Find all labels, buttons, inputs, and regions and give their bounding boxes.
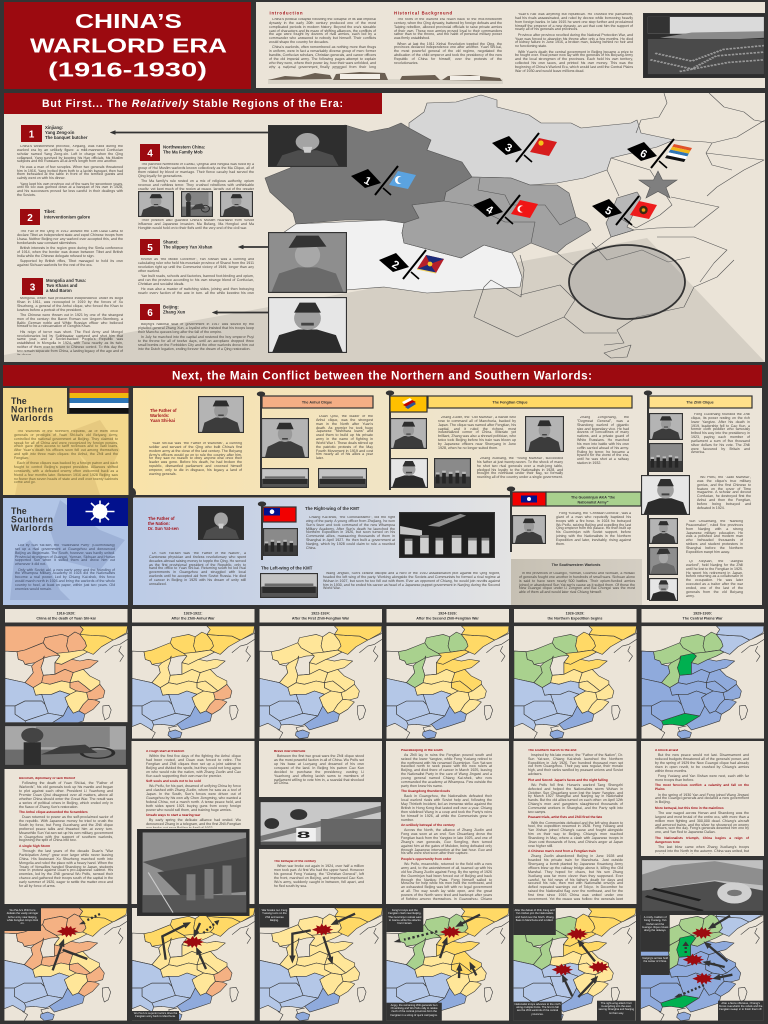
flag: 2 Tibet	[379, 250, 444, 279]
section 2: Tibet: Tibet:	[44, 209, 56, 214]
banner: main conflict heading: Next, the Main Conflict between the Northern and Southern Warlords:	[172, 370, 592, 382]
banner: stable regions heading: But First... The Relatively Stable Regions of the Era:	[42, 98, 343, 110]
text panel: 1926-1929: A Chinese man's nest from a Fengtian train	[528, 849, 596, 853]
text: Xinjiang: Yang kept his own province out of the wars for seventeen years, until he too was gunned down at a banquet of his own in 1928, and his successors proved far less careful in their dealings with the Soviets.	[17, 182, 123, 197]
text panel: 1916-1920: A single Sigh Storm	[19, 844, 50, 848]
photo: Yang Zeng-xin	[268, 125, 347, 167]
text: Xinjiang: He was a man of few scruples. When two generals threatened him in 1916, Yang invited them both to a lavish banquet, then had them beheaded at the table in front of the terrified guests and calmly went on with his dinner.	[17, 165, 123, 180]
text: Sun Yat-sen: Dr. Sun Yat-sen was "the Father of the Nation", a Cantonese physician and tireless revolutionary who spent decades abroad raising money to topple the Qing. He served as the first provisional president of the Republic, only to hand the office to Yuan Shi-kai. Returning south he led rival governments in Guangzhou and struggled with local warlords until he accepted aid from Soviet Russia. He died of cancer in Beijing in 1925 with his dream of unity still unrealized.	[149, 552, 246, 586]
map: First Zhili-Fengtian war	[132, 908, 255, 1021]
photo: Yuan Shi-kai	[198, 396, 244, 433]
text: Wu Peifu: Wu Peifu, the "Jade Marshal", was the clique's true military genius, and the first Chinese to feature on the cover of Time magazine. A scholar and devout Confucian, he destroyed first the Anhui and then the Fengtian, before being betrayed and defeated in 1924.	[697, 476, 751, 510]
map: Central Plains War	[640, 915, 764, 1021]
section: Fengtian Clique	[386, 390, 632, 490]
callout: expedition opening: After the defeat of Zhili, Feng and Yan Xishan join the Nationalists and hand over the North. Zhang flees to Manchuria and is killed.	[515, 909, 554, 922]
section 3: Mongolia and Tuva: 3	[30, 282, 36, 294]
text: historical background, column two: With Yuan's death the central government in Beijing became a prize to be fought over. Real power now lay with the generals of his Beiyang Army and the local strongmen of the provinces. Each held his own territory, collected his own taxes, and printed his own money. This was the beginning of China's Warlord Era, which would last until the Central Plains War of 1930 and would leave millions dead.	[515, 50, 633, 73]
photo: troops by train	[137, 829, 250, 916]
callout: Zhili resurgence: Angry, the remaining Zhili generals Sun Chuanfang and Wu Peifu rally to retake much of the central provinces from the Fengtian in a string of quick campaigns.	[390, 1004, 438, 1017]
text panel: 1929-1930: More betrayal, but this time in the mainlines	[655, 806, 724, 810]
section: KMT wings: The Left-wing of the KMT	[261, 566, 313, 570]
flag: 1 Xinjiang	[351, 166, 416, 195]
timeline column 4	[386, 609, 509, 1021]
arrow: Shanxi portrait	[243, 246, 268, 248]
text: Fengtian general: Zhang Zongchang, the "Dogmeat General", was a Shandong warlord of gigantic size and legendary vice. He had dozens of concubines of many nations, and a private guard of White Russians. He marched his men into battle with his own coffin carried ahead of his army. Ruling by terror, he became a byword for the worst of the era, until he was shot at a railway station in 1932.	[577, 416, 629, 465]
photo: Ma warlord one	[138, 191, 174, 217]
heading: historical background: Historical Background	[394, 10, 452, 16]
photo: Yan Xishan	[268, 232, 347, 293]
header: 1926-1929: the Northern Expedition begins	[548, 616, 602, 620]
callout: First Zhili-Fengtian war	[132, 1011, 179, 1020]
header: 1920-1922: 1920-1922:	[184, 612, 202, 616]
map: 1916-1920	[5, 626, 128, 722]
text panel: 1916-1920: Through the last years of the decade Duan's "War Participation Army" grew ever larger while never leaving China. His lieutenant Xu Shuzheng marched north into Mongolia and ruled the place with a heavy hand. When the Treaty of Versailles handed Shandong to Japan, students rose in protest against Duan's pro-Japanese cabinet. His enemies, led by the Zhili general Wu Peifu, sensed their chance and gathered their troops south of the capital in the early summer of 1920, eager to settle the matter once and for all by force of arms.	[19, 849, 113, 888]
text: Zhang Zuolin: Zhang Zuolin, the "Old Marshal", a bandit who rose to command all of Manchuria, backed by Japan. The clique was named after Fengtian, his capital, and it ruled the richest, most industrialized corner of China. Illiterate yet brilliant, Zhang was also a shrewd politician, who twice took Beijing before his train was blown up by Japanese officers near Shenyang in June 1928, when he no longer suited them.	[438, 416, 516, 450]
callout: Nanjing's defense: Nanjing's armies hold the center of China.	[642, 957, 668, 963]
heading: Southern Warlords: Southern	[11, 514, 53, 524]
section: Guominjun	[507, 486, 641, 554]
text panel: 1926-1929: Inspired by his late mentor, the "Father of the Nation", Dr. Sun Yat-sen, Chiang Kai-shek launched the Northern Expedition in July 1926. Two hundred thousand men set out from Guangzhou. Their pay was regular, their morale high, and their ranks swelled by peasant unions and Soviet advisers.	[528, 753, 623, 776]
flag: 3 Mongolia	[492, 133, 557, 162]
section 3: Mongolia and Tuva: Two Khans and	[46, 283, 78, 288]
photo: Wang Jingwei	[260, 573, 318, 598]
map: Feng Yuxiang's retreat	[386, 908, 509, 1021]
photo: Chiang Kai-shek	[263, 528, 298, 556]
photo: troops on parade	[643, 13, 765, 78]
map: Northern Expedition	[513, 908, 636, 1021]
header: 1924-1926: 1924-1926:	[438, 612, 457, 616]
map: 1926-1929	[514, 626, 636, 739]
photo: Fengtian general	[525, 416, 564, 452]
text: Northern Warlords: Each of these cliques was backed by a foreign patron and each fought to control Beijing's puppet president. Alliances shifted constantly, with a defeated enemy often welcomed back as a friend a few months later. Between 1916 and 1928 Beijing saw no fewer than seven heads of state and well over twenty cabinets come and go.	[14, 461, 118, 484]
section 3: Mongolia and Tuva: Mongolia and Tuva:	[46, 278, 87, 283]
section 1: Xinjiang: Yang Zeng-xin	[45, 130, 75, 135]
heading: Northern Warlords: The	[11, 396, 27, 406]
callout: Feng Yuxiang's retreat	[386, 908, 423, 932]
map: 1922-1924	[260, 626, 382, 739]
section: Yuan Shi-kai: Yuan Shi-kai	[150, 418, 175, 423]
text panel: 1929-1930: Feng Yuxiang and Yan Xishan were next, each with far more troops than before.	[655, 774, 749, 782]
text panel: 1929-1930: But the new peace would not last. Disarmament and reduced budgets threatened all of the generals' power, and by the spring of 1929 the New Guangxi clique had already risen in open revolt, to be crushed by Chiang's armies within three months.	[655, 753, 749, 773]
callout: Zhili-Anhui war	[4, 908, 41, 931]
header: 1926-1929	[514, 609, 636, 622]
panel: Northern Warlords	[3, 388, 129, 495]
section: Southwestern Warlords: The Southwestern Warlords	[552, 563, 600, 567]
callout: expedition eastern thrust: The right-wing attack from Guangdong into the east, seizing Shanghai and Nanjing on their way.	[599, 1002, 634, 1015]
callout: Zhili resurgence	[386, 1003, 442, 1021]
panel: main conflict	[3, 377, 762, 605]
region: Shanxi	[606, 192, 641, 237]
flag: 5 Shanxi	[592, 196, 657, 225]
flag: Blue Sky White Sun	[67, 498, 128, 526]
text: historical background, column two: Province after province revolted during the National Protection War, and Yuan was forced to abandon his throne after only a few months. He died of kidney failure in June 1916, a broken man, leaving behind no heir and no functioning state.	[515, 33, 633, 48]
header: 1929-1930	[642, 609, 764, 622]
text: historical background, column one	[394, 18, 502, 66]
title block: WARLORD ERA	[30, 34, 227, 58]
section 2: Tibet: Interventionism galore	[44, 214, 91, 220]
text: Guominjun: Feng Yuxiang, the "Christian General", was a giant of a man who reputedly baptized his troops with a fire hose. In 1924 he betrayed Wu Peifu, seizing Beijing and expelling the last Qing emperor from the palace. He then built up his Guominjun with Soviet support, before joining with the Nationalists in the Northern Expedition and later, inevitably, rising against them.	[556, 512, 631, 546]
text: Zhili one: Feng Guozhang founded the Zhili clique, its power resting on the rich lower Yangtze. After his death in 1919, leadership fell to Cao Kun, a former cloth peddler who famously bribed his way into the presidency in 1923, paying each member of parliament a sum of five thousand silver dollars for his vote. The Zhili were favoured by Britain and America.	[691, 413, 750, 454]
callout: expedition central thrust: Nationalist troops advance to the north along multiple fronts. The first to fall are the Zhili warlords of the central provinces.	[514, 1003, 560, 1016]
section 1: Xinjiang	[17, 125, 123, 202]
text: Yuan Shi-kai: Yuan Shi-kai was "the Father of Warlords", a cunning soldier and servant of the Qing who built China's first modern army at the close of the last century. The Beiyang Army's officers would go on to rule the country after him, for they saw no reason to obey anyone else once their leader was gone. Before his death, he had broken the republic, dismantled parliament and crowned himself emperor, only to die in disgrace, his legacy a land of warring generals.	[149, 442, 242, 476]
panel: introduction and historical background	[256, 2, 765, 88]
photo: Ma warlord two	[181, 191, 213, 217]
text panel: 1926-1929	[514, 741, 636, 904]
text panel: 1920-1922: Within the first five days of the fighting the Anhui clique had been routed, and Duan was forced to retire. The Fengtian and Zhili cliques then set up a joint cabinet in Beijing and divided the spoils, but they could not long agree on who would rule the nation, with Zhang Zuolin and Cao Kun each supporting their own man for premier.	[146, 754, 241, 778]
flag: 2 Tibet: 2	[390, 259, 401, 272]
section 2: Tibet	[17, 209, 123, 270]
callout: Second Zhili-Fengtian war: War breaks out. Feng Yuxiang turns on the Zhili and seizes Beijing.	[262, 909, 287, 922]
section: Anhui Clique: The Anhui Clique	[302, 400, 332, 404]
header: 1924-1926	[386, 609, 509, 622]
section: Zhili Clique	[641, 390, 752, 601]
text panel: 1926-1929: Plot and Sword: Japan's faces and the night falling	[528, 778, 608, 782]
banner: main conflict heading	[3, 365, 762, 386]
section 5: Shanxi: 5	[147, 243, 153, 254]
photo: Wu Peifu	[641, 475, 690, 515]
photo: Anhui troops	[261, 468, 309, 488]
header: 1920-1922	[132, 609, 254, 622]
timeline column 1	[4, 609, 128, 1021]
section: Yuan Shi-kai: Warlords:	[150, 413, 169, 418]
heading: introduction: Introduction	[270, 10, 303, 16]
section 4: Northwestern China: The Ma Family Mob	[163, 150, 203, 154]
section: Yuan Shi-kai	[149, 396, 244, 482]
heading: Northern Warlords: Warlords	[11, 413, 53, 423]
text: Beijing	[138, 323, 254, 353]
title block: (1916-1930)	[48, 58, 207, 82]
section: Southwestern Warlords	[511, 559, 642, 605]
header: 1929-1930: The Central Plains War	[682, 616, 723, 620]
section 6: Beijing: Beijing:	[163, 304, 179, 310]
flag: Guominjun	[512, 492, 546, 506]
callout: expedition central thrust	[513, 1002, 562, 1021]
text panel: 1926-1929: With the Communists defeated and the left wing drawn to heel, the expedition resumed in 1928. Feng Yuxiang and Yan Xishan joined Chiang's cause and fought alongside him on their way to Beijing. Chiang's men reached Shandong in May, where a clash with Japanese troops in Jinan cost thousands of lives, and China's anger at Japan rose higher still.	[528, 821, 623, 848]
section: Fengtian Clique: The Fengtian Clique	[492, 400, 528, 404]
arrow: Xinjiang portrait	[115, 132, 268, 134]
section 4: Northwestern China: Northwestern China:	[163, 144, 206, 150]
timeline column 6	[641, 609, 764, 1021]
photo: Zhang Xueliang	[390, 458, 428, 488]
header: 1916-1920	[5, 609, 128, 622]
text panel: 1929-1930: The most ferocious conflict: a calamity and fall on the Plains	[655, 783, 749, 791]
text: Northern Warlords	[14, 430, 118, 486]
text panel: 1920-1922: Unsafe ways to start a nearing war	[146, 813, 200, 817]
title block	[4, 2, 251, 89]
region: Mongolia and Tuva	[409, 95, 674, 185]
flag: 4 Northwestern China: 4	[484, 204, 496, 217]
flag: 5 Shanxi: 5	[603, 205, 614, 218]
section 2: Tibet: 2	[27, 213, 33, 224]
text panel: betrayal	[259, 849, 382, 904]
callout: Feng Yuxiang's retreat: Feng's troops and the Fengtian clash near Beijing. The Guominjun retreat west to Gansu while Wu attacks from Henan.	[388, 909, 421, 925]
text: Zhili three: Qi Xieyuan, the "Jiangsu warlord", held Nanjing for the Zhili until he lost to the Fengtian in 1925. He spent his retirement in Japan, before returning as a collaborator in the occupation. He was later executed as a traitor after the war ended, one of the last of the generals from the old Beiyang army.	[686, 560, 743, 598]
text panel: 1929-1930: The war waged across Henan and Shandong was the largest and most brutal of the entire era, with more than a million men fighting and 300,000 dead. Chiang's aircraft and armored trains, and the silver he showered on enemy officers, won the day. Feng's generals deserted him one by one, and Yan fled to Japanese Dalian.	[655, 811, 749, 834]
heading: Southern Warlords	[11, 506, 53, 533]
text panel: 1916-1920: Following the death of Yuan Shi-kai, the "Father of Warlords", his old generals took up his mantle and began to plot against each other. President Li Yuanhong and Premier Duan Qirui disagreed over all matters, above all whether China should enter the Great War. The result was a series of political crises in Beijing, which ended only in the fiasco of Zhang Xun's restoration.	[19, 781, 113, 808]
section: Sun Yat-sen: The Father of	[148, 516, 175, 521]
text panel: betrayal: When war broke out again in 1924, over half a million men took part. At first Wu had the upper hand. However his general Feng Yuxiang, the "Christian General", left the front, marched on Beijing, and imprisoned Cao Kun. Wu's army, suddenly caught in between, fell apart, and he fled south by sea.	[274, 864, 364, 888]
section 5: Shanxi: The slippery Yan Xishan	[163, 244, 213, 250]
map: 1920-1922	[132, 626, 254, 739]
section 3: Mongolia and Tuva	[17, 278, 123, 355]
text panel: 1924-1926: Across the North, the alliance of Zhang Zuolin and Feng was soon at an end. Sun Chuanfang drove the Fengtian back from the Yangtze in late 1925, and one of Zhang's own generals, Guo Songling, then turned against him at the gates of Mukden, being defeated only through Japanese intervention at the last hour. Guo and his wife were shot soon after their capture.	[401, 828, 492, 855]
photo: Anhui camp	[318, 468, 367, 488]
flag: 6 Beijing	[627, 139, 692, 168]
text: Beijing: In July he marched into the capital and restored the boy emperor Puyi to the throne for all of twelve days, until an aeroplane dropped three small bombs on the Forbidden City and the other warlords drove him out into the Dutch legation, ending forever the dream of a Qing restoration.	[138, 335, 254, 351]
section: Guominjun: Nationalist Army"	[578, 500, 609, 504]
flag: 1 Xinjiang: 1	[362, 175, 373, 188]
text: Southern Warlords: Only with Soviet aid, a new party army and the founding of the Whampoa Military Academy in 1924 did the Nationalists become a real power. Led by Chiang Kai-shek, this force would march north in 1926 and bring the warlords of the whole country to heel, at least on paper, within just two years. Old enemies would remain.	[15, 568, 115, 591]
panel: Southern Warlords	[3, 498, 128, 605]
heading: Northern Warlords: Northern	[11, 404, 53, 414]
header: 1916-1920: 1916-1920:	[57, 612, 75, 616]
callout: end of the war	[718, 1001, 763, 1021]
photo: Zhili general	[649, 547, 678, 575]
callout: opening of the war	[641, 915, 670, 952]
section 1: Xinjiang: The banquet butcher	[45, 135, 88, 140]
photo: Zhang Xun	[268, 297, 347, 353]
header: 1916-1920: China at the death of Yuan Shi-kai	[36, 616, 96, 620]
text panel: 1926-1929: Peasant trials, artist fists and Zhili fired the fate	[528, 815, 602, 819]
circle: central warlord heartland	[569, 245, 685, 319]
text: Xinjiang	[17, 145, 123, 202]
flag: KMT	[263, 507, 296, 522]
arrow: Beijing portrait	[217, 312, 268, 314]
text panel: 1924-1926: As Zhili lay in ruins the Fengtian poured south and seized the lower Yangtze, while Feng Yuxiang retired to the northwest with his renamed Guominjun. Sun Yat-sen travelled north to seek peace with the new rulers at Beijing, and died there of cancer in March 1925, leaving the Nationalist Party in the care of Wang Jingwei and a young general named Chiang Kai-shek, who now commanded the academy at Whampoa. Few outside the party then knew his name.	[401, 753, 492, 788]
photo: Feng Yuxiang	[512, 515, 546, 544]
map: 1929-1930	[642, 626, 764, 739]
section 6: Beijing	[138, 304, 254, 353]
text: Mongolia and Tuva	[17, 297, 123, 355]
flag: 6 Beijing: 6	[638, 148, 649, 161]
text panel: 1916-1920: The Anhui clique astounded the Scramblers	[19, 810, 88, 814]
text: Tibet: British interests in the region grew during the Simla conference of 1914, when the border was drawn between Tibet and British India while the Chinese delegate refused to sign.	[17, 246, 123, 258]
header: 1926-1929: 1926-1929:	[566, 612, 584, 616]
map: stable regions of China	[265, 93, 765, 358]
section 5: Shanxi: Shanxi:	[163, 240, 179, 244]
section 1: Xinjiang: 1	[29, 130, 35, 140]
text panel: 1924-1926: People's opportunity from order	[401, 857, 451, 861]
photo: Zhili officers	[649, 443, 683, 472]
section 3: Mongolia and Tuva: a Mad Baron	[46, 288, 72, 293]
photo: Qi Xieyuan	[649, 578, 678, 601]
map: Zhili-Anhui war	[4, 908, 127, 1021]
text: historical background, column two	[515, 13, 633, 78]
callout: Nanjing's defense	[641, 956, 670, 975]
photo: Ma warlord three	[220, 191, 253, 217]
section 1: Xinjiang: Xinjiang:	[45, 125, 64, 130]
heading: Southern Warlords: Warlords	[11, 523, 53, 533]
heading: Southern Warlords: The	[11, 506, 27, 516]
text: Shanxi: Yan built roads, schools and factories, banned foot-binding and opium, and ran the province according to his own strange blend of Confucian, Christian and socialist ideals.	[138, 274, 254, 286]
photo: Duan Qirui	[261, 418, 309, 458]
photo: Nationalist ceremony	[399, 512, 495, 558]
title block: CHINA’S	[75, 10, 182, 33]
text: Ma family one	[138, 163, 254, 190]
flag: 3 Mongolia: 3	[503, 142, 514, 155]
callout: opening of the war: A costly coalition of Feng Yuxiang, Yan Xishan and the Guangxi clique moves along the railways.	[642, 916, 668, 932]
header: 1924-1926: After the Second Zhili-Fengtian War	[416, 616, 479, 620]
text: KMT right wing: Chiang Kai-shek, "the Generalissimo", led the right wing of the party. A young officer from Zhejiang, he won Sun's favor and took command of the new Whampoa Military Academy. After Sun's death he launched the Northern Expedition in 1926, but soon turned on his Communist allies, massacring thousands of them in Shanghai in April 1927. He then built a government at Nanjing, which by 1928 could claim to rule a reunited China.	[306, 516, 395, 550]
photo: Sun Chuanfang	[649, 518, 678, 544]
header: 1922-1924: After the First Zhili-Fengtian War	[292, 616, 350, 620]
section: Sun Yat-sen: Dr. Sun Yat-sen	[148, 526, 179, 531]
section: KMT wings: The Right-wing of the KMT	[305, 506, 360, 511]
region: Tibet	[270, 220, 522, 293]
photo: Fengtian officers	[434, 458, 471, 488]
text panel: 1920-1922	[132, 741, 254, 904]
region: Northwestern China	[402, 177, 591, 258]
photo: rickshaw by sheds	[4, 725, 127, 766]
text panel: 1929-1930: The Nationalists triumph, China begins a reign of dangerous tone	[655, 836, 749, 844]
other provinces outlines	[474, 93, 765, 358]
text panel: 1920-1922: Soft souls and souls not to be sold	[146, 779, 201, 783]
text: Sun Chuanfang: Sun Chuanfang, the "Nanking Peacemaker", ruled five provinces from Nanjing with a strong Japanese military education. He was a polished and modern man who beheaded thousands of strikers and student protesters in Shanghai before the Northern Expedition swept him away.	[686, 520, 743, 554]
photo: Feng Guozhang	[649, 413, 683, 440]
region: Xinjiang	[265, 123, 472, 224]
flag: Beiyang five colours	[67, 388, 129, 414]
star: Beijing	[639, 171, 677, 198]
header: 1920-1922: After the Zhili-Anhui War	[171, 616, 215, 620]
callout: Zhili-Anhui war: Wu Pei-fu's Zhili force defeats the vastly stronger Anhui army near Beijing, while Fengtian troops look on.	[7, 909, 38, 925]
photo strip: town skyline	[268, 72, 503, 84]
map: Second Zhili-Fengtian war	[260, 908, 382, 1021]
text: Tibet: Supported by British rifles, Tibet managed to hold its own against Sichuan warlords for the rest of the era.	[17, 259, 123, 267]
section: KMT wings	[258, 502, 500, 598]
photo: Zhang Zuolin	[390, 418, 427, 449]
text panel: 1924-1926: Back in Guangzhou, the Nationalists defeated their local warlord rivals with Soviet help and, following the May Thirtieth Incident, led an immense strike against the British in Hong Kong that lasted well over a year. Chiang then sidelined Wang in a coup and took the Party's reins for himself in 1926, all while the Communists grew in number.	[401, 794, 492, 822]
section: Sun Yat-sen	[148, 506, 246, 592]
photo: biplane number 8	[260, 801, 382, 846]
text: Anhui Clique: Duan Qirui, the leader of the Anhui clique, was the strongest man in the North after Yuan's death. As premier he took huge Japanese "Nishihara loans" and used them to build up his private army in the name of fighting in World War I. These deals stirred up the patriotic protests of the May Fourth Movement in 1919 and cost him nearly all of his allies a year later.	[316, 415, 373, 460]
text: historical background, column one: When at last the 1911 Xinhai Revolution toppled the Qing, the provinces declared independence one after another. Yuan Shi-kai, the most powerful general of the old regime, negotiated the abdication of the child emperor and took the presidency of the new Republic of China for himself, over the protests of the revolutionaries.	[394, 42, 502, 65]
section: Guominjun: The Guominjun AKA "the	[571, 495, 615, 499]
section 6: Beijing: Zhang Xun	[163, 310, 186, 314]
flag: Fengtian	[390, 396, 427, 412]
section 5: Shanxi	[138, 239, 254, 294]
section 4: Northwestern China: 4	[147, 148, 153, 160]
text panel: 1926-1929: Wu Peifu fell first. Hunan's warlord Tang Shengzhi defected and helped the Nationalists storm Wuhan in October. Sun Chuanfang soon lost the lower Yangtze, and by March 1927 Shanghai and Nanjing lay in Nationalist hands. But the old allies turned on each other: on April 12th Chiang's men and gangsters slaughtered thousands of Communist workers in Shanghai, and the Party split into two camps.	[528, 783, 623, 814]
section 6: Beijing: 6	[147, 308, 153, 319]
panel: stable regions with map	[4, 93, 765, 362]
flag: 4 Northwestern China	[473, 195, 538, 224]
text: Southern Warlords	[15, 544, 115, 598]
text panel: 1929-1930: In the spring of 1930 Yan and Feng joined Wang Jingwei and the Guangxi generals and declared a new government in Beijing.	[655, 793, 749, 804]
timeline column 3	[259, 609, 382, 1021]
timeline column 5	[513, 609, 636, 1021]
timeline column 2	[132, 609, 255, 1021]
photo: armored wreck	[641, 859, 764, 912]
photo: Sun Yat-sen	[198, 506, 244, 540]
section: Sun Yat-sen: the Nation:	[148, 521, 170, 526]
text panel: 1920-1922: Wu Peifu, for his part, dreamed of unifying China by force and clashed with Zhang Zuolin, whom he saw as a tool of Japan. In the South, Sun's forces were driven out of Guangzhou by his own ally Chen Jiongming, who wanted a federal China, not a march north. A tense peace held, and both sides spent 1921 buying guns from every foreign power who would sell them, and training huge armies.	[146, 784, 241, 812]
callout: expedition opening	[513, 908, 556, 935]
text panel: 1922-1924: Between the first two great wars the Zhili clique stood as the most powerful faction in all of China. Wu Peifu set up his base at Luoyang and dreamed of his own conquest of the land. In Beijing his patron Cao Kun decided to purchase the presidency, ousting Li Yuanhong and offering lavish sums to members of parliament willing to vote him in, a scandal that shocked all China.	[274, 754, 364, 785]
header: 1922-1924	[260, 609, 382, 622]
text panel: 1916-1920	[4, 769, 128, 904]
text panel: 1922-1924	[259, 741, 382, 797]
callout: end of the war: After a fierce offensive, Chiang's forces overwhelm the rebels and the Fengtian sweep in to finish them off.	[719, 1002, 762, 1011]
callout: First Zhili-Fengtian war: Wu Pei-fu's superior tactics drive the Fengtian army back to Manchuria.	[134, 1012, 177, 1018]
section 4: Northwestern China	[138, 144, 254, 232]
text panel: 1924-1926: An unlikely betrayal of the century	[401, 823, 455, 827]
heading: Northern Warlords	[11, 396, 53, 423]
header: 1922-1924: 1922-1924:	[311, 612, 330, 616]
callout: Second Zhili-Fengtian war	[260, 908, 289, 928]
callout: expedition eastern thrust	[597, 1001, 636, 1021]
text: Tibet	[17, 230, 123, 270]
banner: stable regions heading	[4, 93, 382, 114]
text panel: 1929-1930	[641, 741, 764, 856]
map: 1924-1926	[386, 626, 509, 739]
section: Zhili Clique: The Zhili Clique	[686, 400, 714, 404]
text: introduction	[269, 18, 376, 69]
header: 1929-1930: 1929-1930:	[693, 612, 712, 616]
section: Yuan Shi-kai: The Father of	[150, 408, 177, 413]
text: Mongolia and Tuva: The Chinese were thrown out in 1921 by one of the strangest men of the century: the Baron Roman von Ungern-Sternberg, a Baltic German noble and White Russian officer who believed himself to be a reincarnation of Genghis Khan.	[17, 313, 123, 328]
text: Shanxi	[138, 258, 254, 294]
text panel: 1916-1920: Duan returned to power as the self-proclaimed savior of the republic. With Japanese money he tried to crush the South by force, but Feng Guozhang and the Zhili clique preferred peace talks and thwarted him at every turn. Meanwhile Sun Yat-sen set up his own military government in Guangzhou with the support of southern warlords, beginning the split of China into two.	[19, 815, 113, 842]
section: Anhui Clique	[257, 392, 373, 488]
text panel: 1924-1926	[386, 741, 509, 904]
text panel: 1924-1926: The Guangdong thunderclouds	[401, 789, 450, 793]
